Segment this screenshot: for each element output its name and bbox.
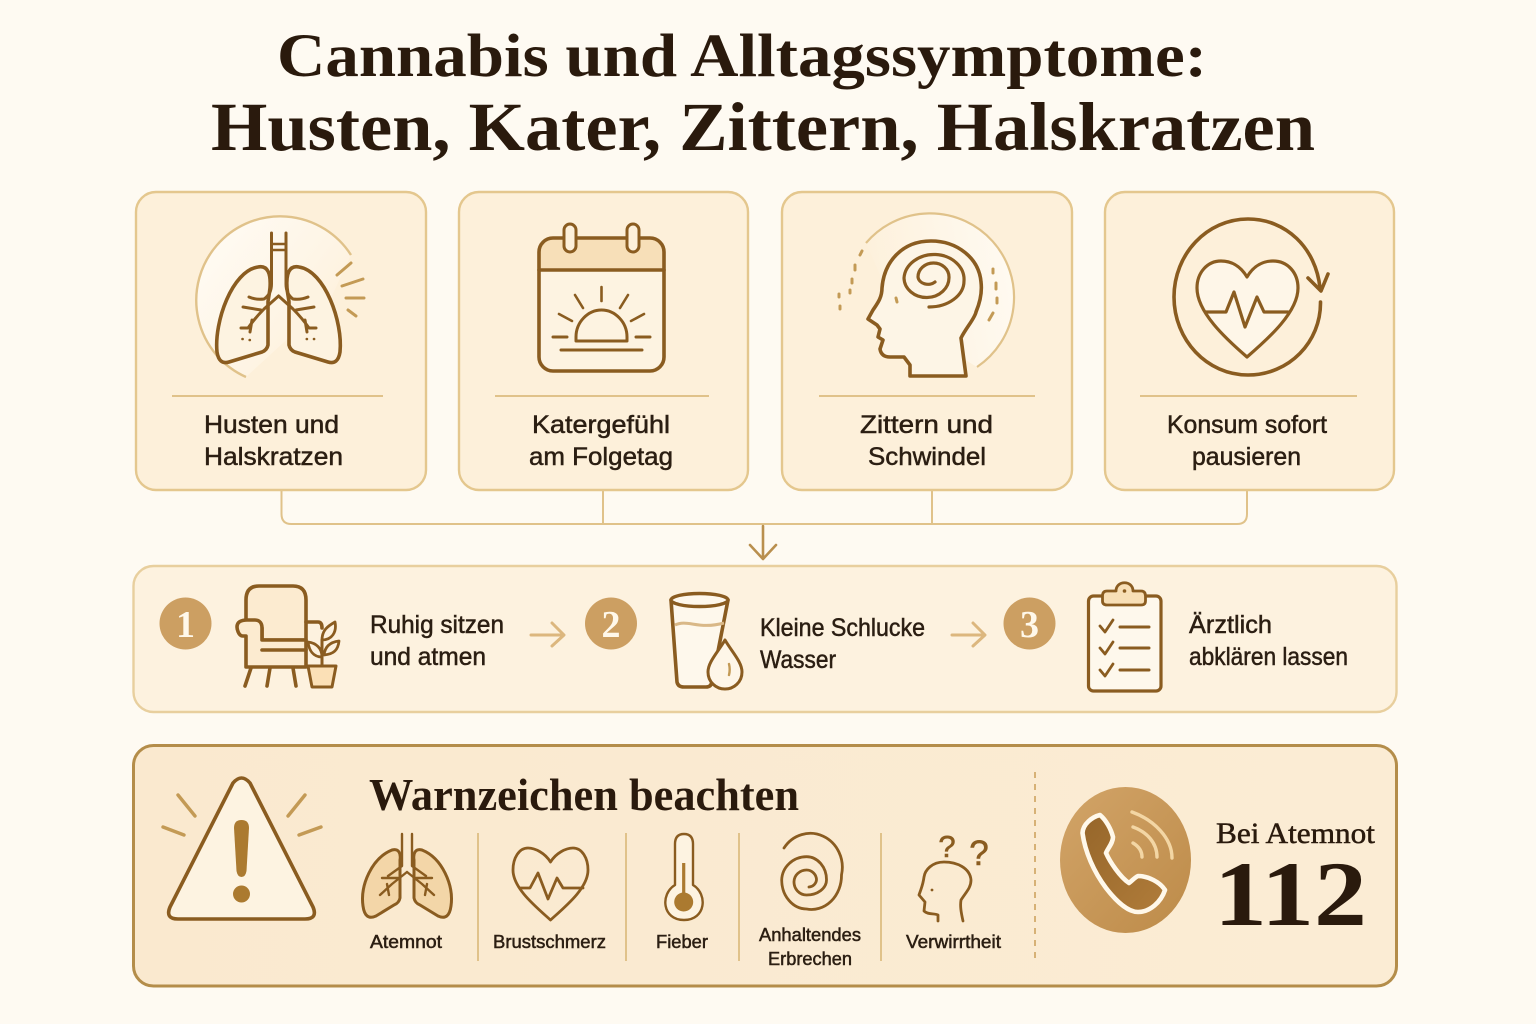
sign: Atemnot [363, 834, 451, 952]
label: Katergefühl [532, 411, 670, 439]
icon: phone [1060, 787, 1191, 933]
text: step 1 [370, 611, 504, 671]
icon: confused head [919, 829, 989, 921]
label [860, 411, 993, 471]
icon: clipboard checklist [1088, 583, 1161, 691]
panel: steps [134, 566, 1396, 712]
label: Zittern und [860, 411, 993, 439]
icon: confused head: ? [938, 829, 956, 864]
panel: Katergefühl [459, 192, 748, 490]
step 2 badge [585, 598, 637, 650]
title: Cannabis und Alltagssymptome: [277, 23, 1207, 90]
label [204, 411, 343, 471]
divider [172, 395, 383, 397]
title [211, 23, 1315, 165]
icon: head with spiral [839, 213, 1014, 376]
divider [1140, 395, 1357, 397]
text: step 2: Wasser [760, 646, 836, 674]
emergency number: 112 [1214, 843, 1367, 945]
label [529, 411, 673, 471]
icon: heart pulse [513, 848, 588, 920]
icon: thermometer [665, 834, 703, 920]
heading: Warnzeichen beachten [369, 770, 799, 820]
text: step 1: Ruhig sitzen [370, 611, 504, 639]
panel: Konsum sofort pausieren [1105, 192, 1394, 490]
label: am Folgetag [529, 443, 673, 471]
icon: armchair with plant [237, 586, 339, 687]
step 3 badge [1004, 598, 1056, 650]
sign: Brustschmerz: Brustschmerz [493, 932, 606, 952]
label: pausieren [1192, 443, 1301, 471]
arrow: step 2 to 3 [952, 623, 985, 646]
emergency number [1214, 817, 1376, 945]
divider [495, 395, 709, 397]
text: step 3: Ärztlich [1189, 611, 1272, 639]
text: step 3 [1189, 611, 1348, 671]
step 1 badge: 1 [176, 604, 195, 646]
icon: lungs [363, 834, 451, 917]
icon: calendar with sunrise [539, 224, 664, 371]
label: Halskratzen [204, 443, 343, 471]
arrow: step 1 to 2 [531, 623, 564, 646]
text: step 2: Kleine Schlucke [760, 614, 925, 642]
label: Schwindel [868, 443, 986, 471]
emergency number: Bei Atemnot [1216, 817, 1376, 850]
sign: Atemnot: Atemnot [370, 932, 442, 952]
panel: warning signs [134, 746, 1396, 986]
icon: lungs [196, 216, 364, 377]
label [1167, 411, 1327, 471]
panel: Zittern und Schwindel [782, 192, 1072, 490]
sign: Brustschmerz [493, 848, 606, 952]
step 2 badge: 2 [602, 604, 620, 646]
sign: Fieber [656, 834, 708, 952]
panel: Husten und Halskratzen [136, 192, 426, 490]
label: Husten und [204, 411, 339, 439]
divider [819, 395, 1035, 397]
arrow: down to steps [750, 526, 776, 559]
sign: Verwirrtheit: Verwirrtheit [906, 932, 1001, 952]
step 1 badge [160, 598, 212, 650]
text: step 3: abklären lassen [1189, 643, 1348, 671]
step 3 badge: 3 [1020, 604, 1039, 646]
title: Husten, Kater, Zittern, Halskratzen [211, 89, 1315, 165]
sign: Anhaltendes Erbrechen: Erbrechen [768, 949, 852, 969]
label: Konsum sofort [1167, 411, 1327, 439]
text: step 2 [760, 614, 925, 674]
connector lines [282, 490, 1247, 524]
sign: Fieber: Fieber [656, 932, 708, 952]
icon: glass with drop [671, 594, 742, 689]
sign: Verwirrtheit [906, 829, 1001, 952]
icon: heart with pulse in cycle [1174, 219, 1328, 375]
icon: warning triangle [163, 778, 321, 919]
icon: confused head: ? [969, 834, 989, 873]
icon: spiral [782, 833, 842, 909]
sign: Anhaltendes Erbrechen: Anhaltendes [759, 925, 861, 945]
text: step 1: und atmen [370, 643, 486, 671]
sign: Anhaltendes Erbrechen [759, 833, 861, 969]
